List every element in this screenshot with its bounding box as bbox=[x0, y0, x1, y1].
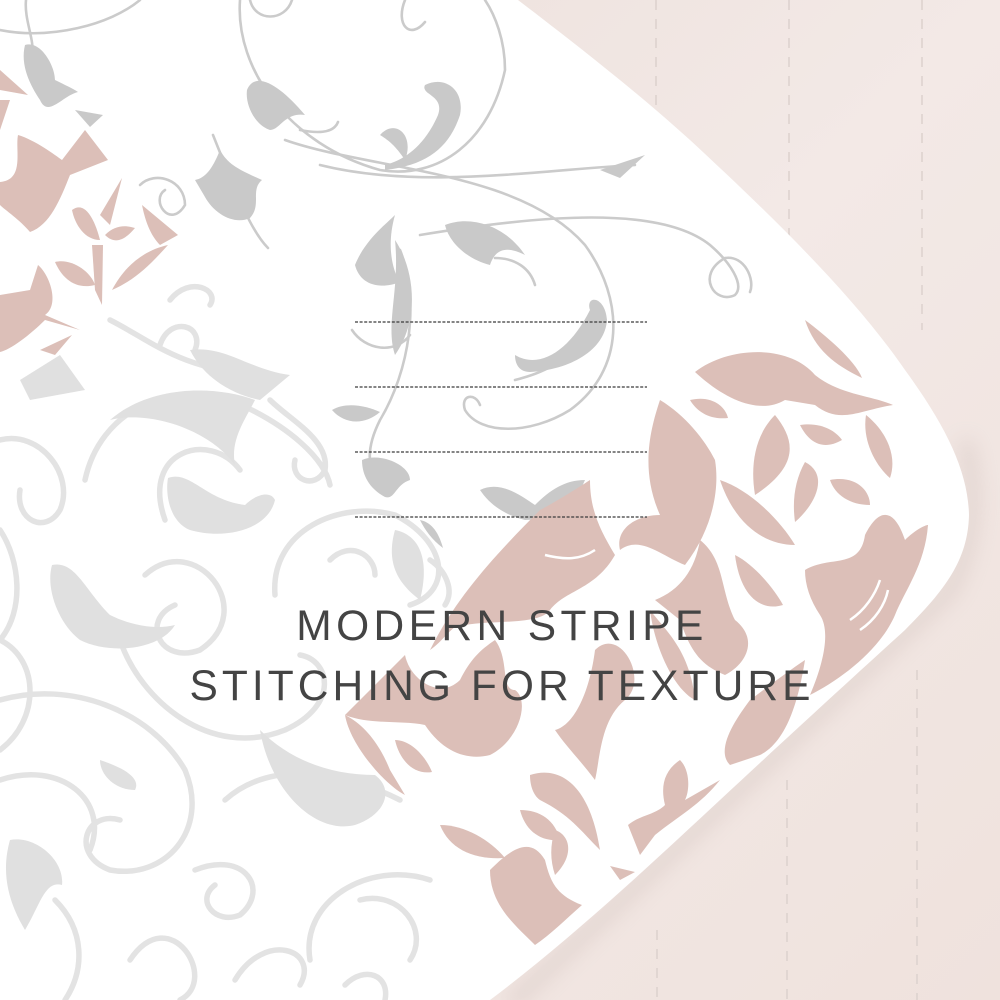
headline: MODERN STRIPE bbox=[296, 603, 708, 650]
floral highlights bbox=[545, 550, 888, 630]
stitching guide lines bbox=[355, 322, 647, 517]
blush floral motifs, upper left bbox=[0, 70, 178, 355]
blush floral motifs, lower right bbox=[345, 320, 928, 945]
pale grey scroll panel, lower left bbox=[0, 287, 449, 1000]
headline bbox=[190, 603, 814, 710]
grey scroll vines, upper bbox=[0, 0, 751, 490]
grey leaf motifs, upper bbox=[24, 44, 645, 548]
headline: STITCHING FOR TEXTURE bbox=[190, 663, 814, 710]
